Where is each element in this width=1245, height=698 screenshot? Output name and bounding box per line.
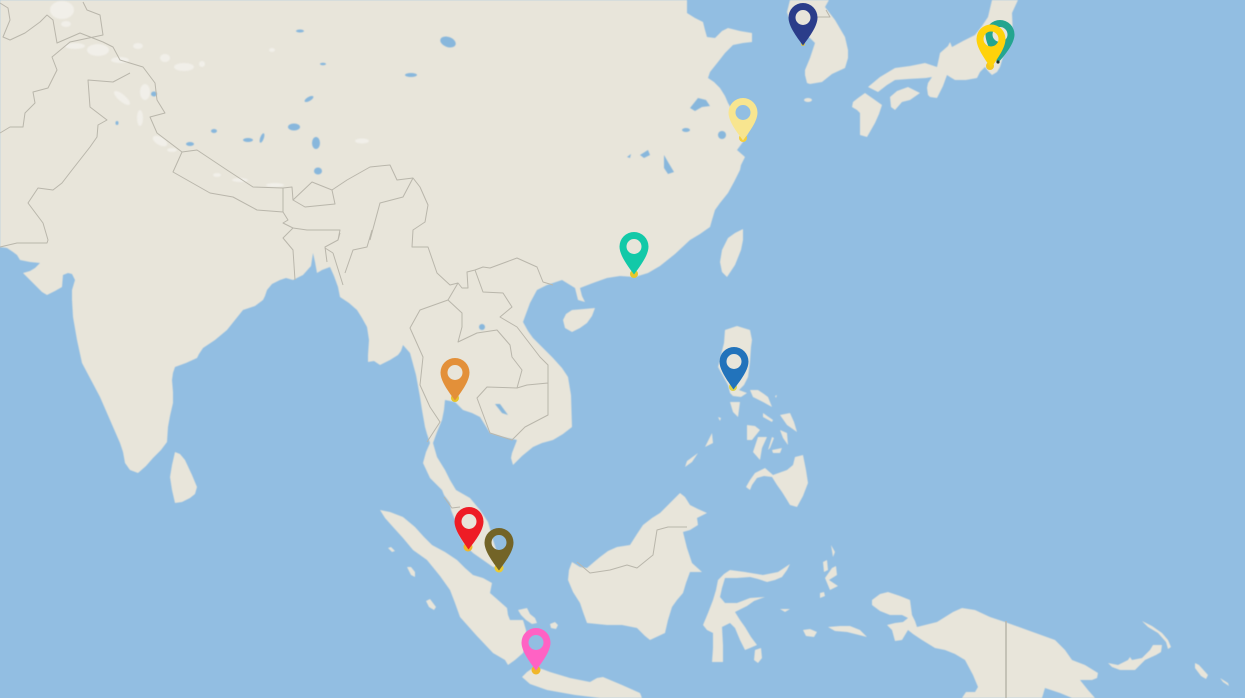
land: Kyushu	[852, 93, 882, 137]
pin: Seoul (navy)	[788, 3, 818, 46]
land: Mindanao	[746, 455, 808, 507]
land: Sumatra	[380, 510, 527, 665]
land: Sumatra islands	[388, 547, 558, 629]
pin: Shanghai (pale yellow)	[728, 98, 758, 142]
land: Java	[522, 668, 642, 698]
location pins	[440, 3, 1014, 674]
land: Borneo	[568, 493, 707, 640]
land: Honshu	[868, 0, 1018, 98]
snow and ice patches	[50, 1, 369, 187]
land: Taiwan	[720, 229, 743, 277]
land: Shikoku	[890, 87, 920, 110]
land: Asian mainland	[0, 0, 752, 568]
pin: Hong Kong (green)	[620, 232, 648, 278]
pin: Tokyo (yellow, front)	[976, 24, 1006, 70]
land: Luzon	[718, 326, 752, 397]
lakes	[116, 30, 726, 415]
land: Sulawesi	[703, 564, 790, 662]
land: Buton and Moluccas	[754, 545, 867, 663]
land: Jeju	[804, 98, 812, 102]
land: Sri Lanka	[170, 452, 197, 503]
land: Bismarck and Solomon islands	[1108, 621, 1229, 686]
pin: Kuala Lumpur (red)	[454, 507, 484, 552]
land: Hainan	[563, 308, 595, 332]
pin: Jakarta (pink)	[522, 628, 550, 674]
land: Korea	[787, 0, 848, 84]
pin: Manila (blue)	[720, 347, 748, 391]
land: New Guinea	[872, 592, 1098, 698]
pin: Bangkok (orange)	[440, 358, 470, 402]
pin: Tokyo (teal, behind)	[986, 20, 1014, 64]
land: Philippine islands	[685, 390, 797, 467]
pin: Singapore (olive)	[484, 528, 514, 572]
